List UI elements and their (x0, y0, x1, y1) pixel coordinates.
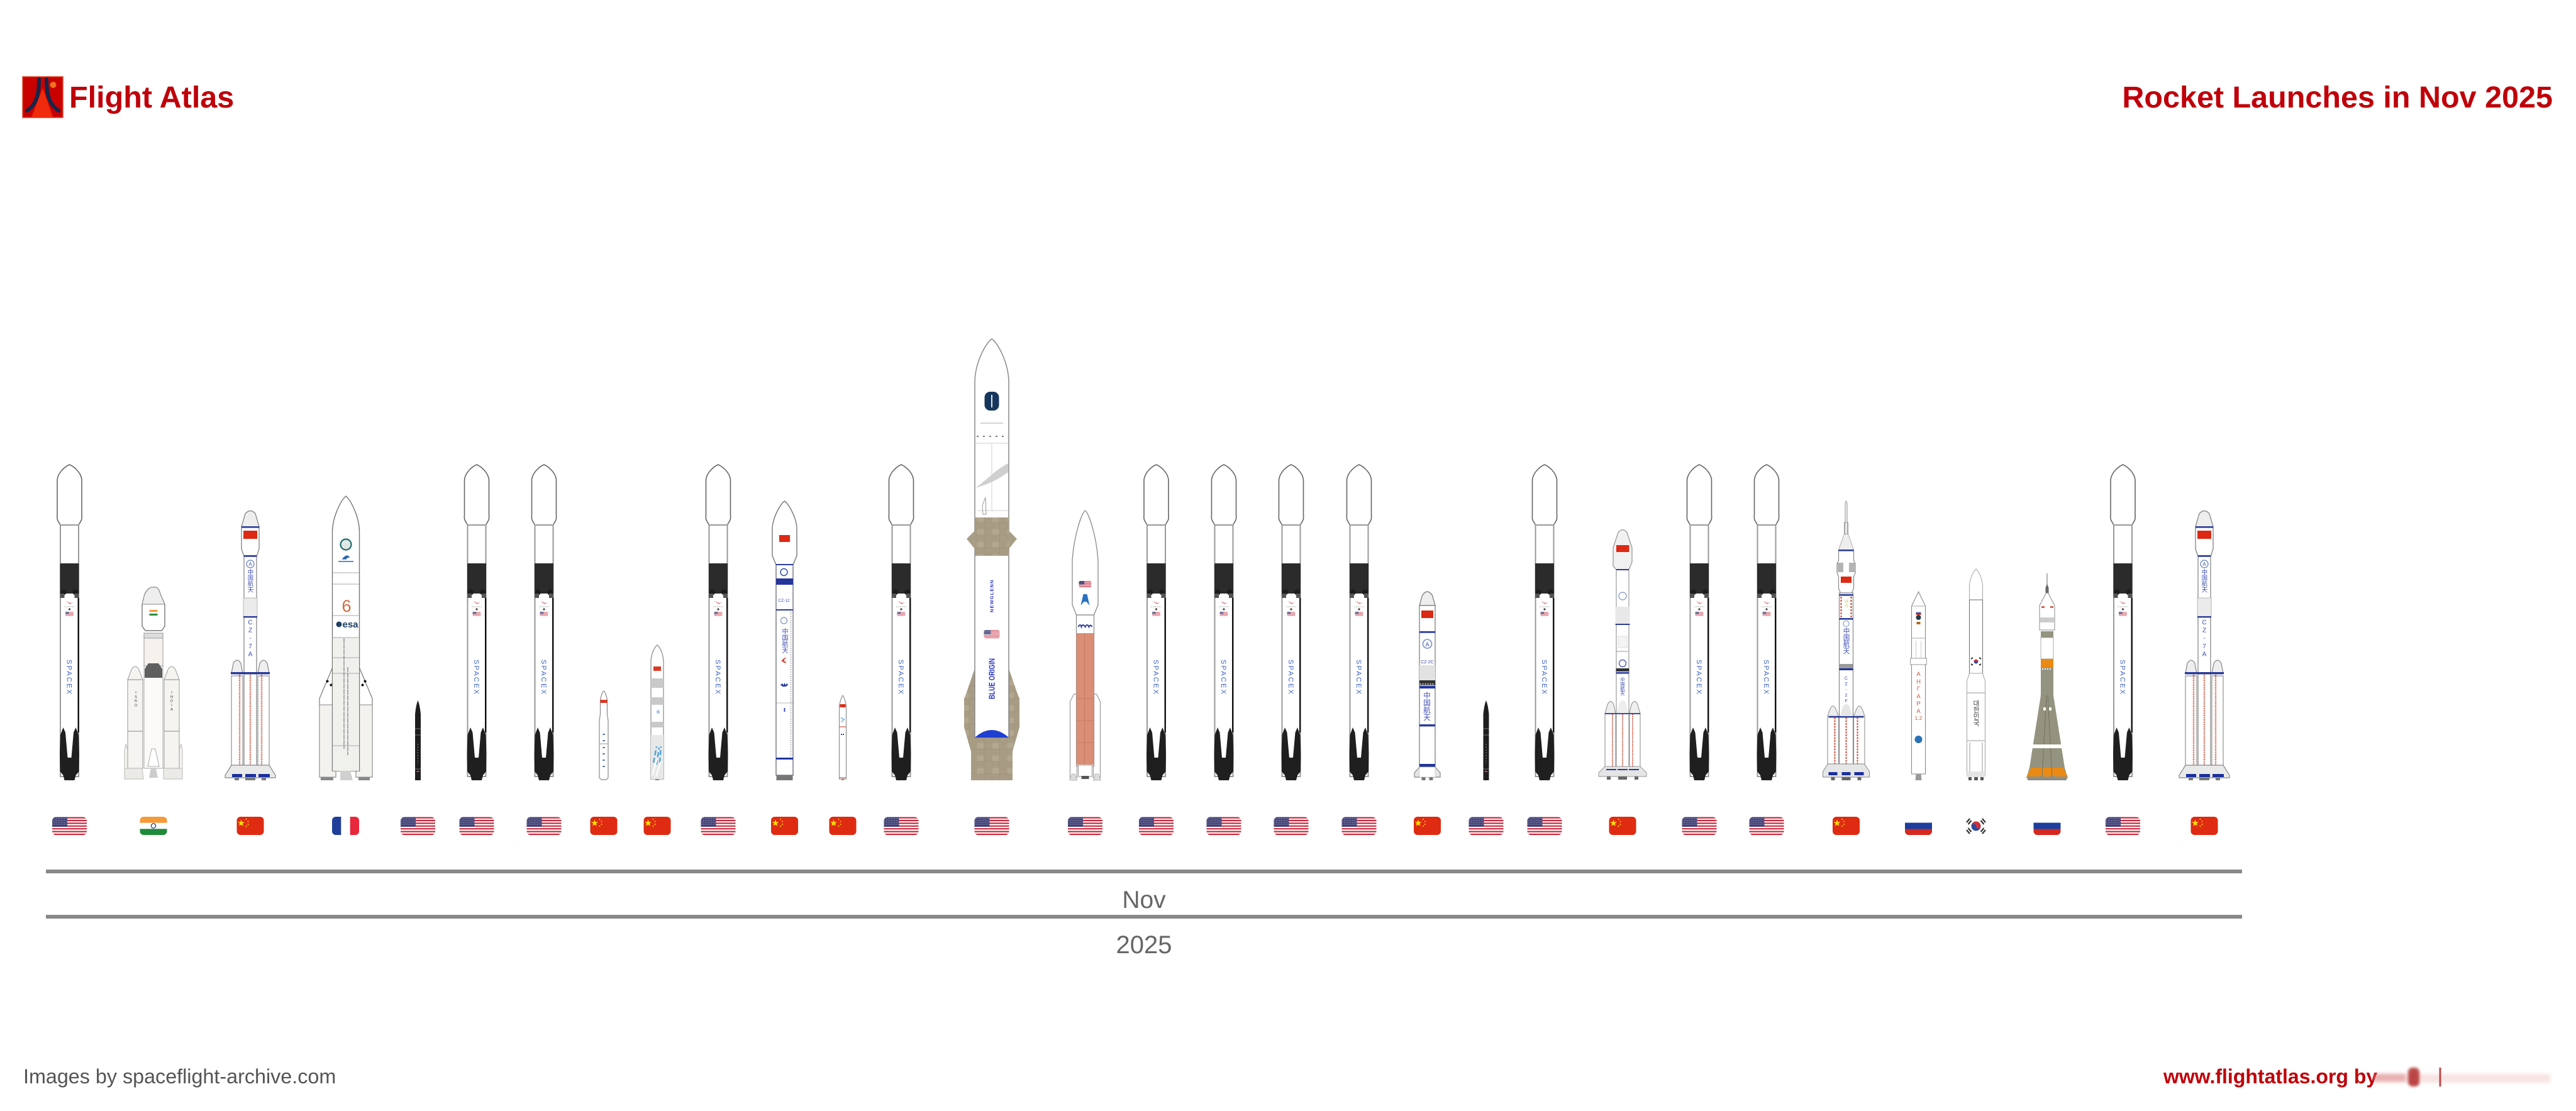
flag: China (2191, 817, 2218, 835)
flag: China (1414, 817, 1441, 835)
flag: China (1833, 817, 1860, 835)
rocket: Falcon 9 (1211, 465, 1236, 780)
rocket: Falcon 9 (1346, 465, 1372, 780)
rocket: Falcon 9 (1279, 465, 1304, 780)
redacted author name (2374, 1068, 2550, 1086)
flag: Russia (1905, 817, 1932, 835)
flag: USA (1469, 817, 1503, 835)
heading: Rocket Launches in Nov 2025: Rocket Launches in Nov 2025 (2122, 80, 2553, 114)
rocket: Long March 3B (1599, 529, 1646, 780)
flag: China (644, 817, 670, 835)
rocket: Ariane 6 (319, 496, 372, 780)
flag: France (332, 817, 359, 835)
rocket: Falcon 9 (57, 465, 82, 780)
timeline label: 2025: 2025 (1116, 931, 1172, 959)
timeline axis: month rule (46, 870, 2242, 873)
flag: USA (701, 817, 736, 835)
flag: USA (52, 817, 87, 835)
flag: USA (2106, 817, 2140, 835)
rocket: Falcon 9 (1687, 465, 1712, 780)
rocket: Falcon 9 (1532, 465, 1557, 780)
flag: USA (1342, 817, 1376, 835)
rocket: New Glenn (964, 339, 1019, 780)
flag: USA (1682, 817, 1717, 835)
flag: USA (1527, 817, 1562, 835)
timeline axis: year rule (46, 915, 2242, 919)
logo icon: Flight Atlas (23, 77, 63, 118)
heading: Flight Atlas: Flight Atlas (69, 80, 234, 114)
rocket: Falcon 9 (464, 465, 489, 780)
flag: China (590, 817, 618, 835)
flag: USA (1068, 817, 1102, 835)
rocket: Long March 2C (1414, 592, 1440, 780)
rocket: Angara 1.2 (1911, 592, 1927, 780)
rocket: Electron (1483, 700, 1489, 780)
flag: India (140, 817, 167, 835)
footer: image credit: Images by spaceflight-archive.com (23, 1065, 336, 1088)
flag: Russia (2034, 817, 2060, 835)
rocket: small Chinese launcher (839, 695, 847, 780)
rocket: small Chinese launcher (599, 691, 608, 780)
flag: USA (459, 817, 494, 835)
rocket: Falcon 9 (531, 465, 557, 780)
rocket: Falcon 9 (2111, 465, 2135, 780)
flag: China (236, 817, 264, 835)
rocket: Falcon 9 (1144, 465, 1169, 780)
rocket: Electron (415, 700, 421, 780)
flag: USA (1274, 817, 1308, 835)
footer: website credit: www.flightatlas.org by (2163, 1065, 2377, 1088)
rocket: Falcon 9 (1754, 465, 1779, 780)
rocket: Falcon 9 (889, 465, 914, 780)
rocket: Nuri KSLV-II (1967, 569, 1985, 780)
flag: South Korea (1967, 819, 1985, 834)
flag: China (829, 817, 857, 835)
flag: USA (1750, 817, 1784, 835)
flag: China (771, 817, 798, 835)
flag: USA (884, 817, 918, 835)
rocket: LVM3 (125, 587, 182, 779)
rocket: Atlas V (1069, 511, 1101, 780)
timeline label: Nov: Nov (1122, 887, 1166, 914)
flag: USA (401, 817, 435, 835)
rocket: Falcon 9 (706, 465, 731, 780)
rocket: Soyuz (2026, 573, 2068, 780)
flag: China (1609, 817, 1636, 835)
rocket: Long March 7A (2179, 511, 2229, 780)
rocket: Long March 2F (1823, 501, 1869, 780)
flag: USA (1206, 817, 1241, 835)
rocket: Long March 7A (225, 511, 275, 780)
flag: USA (527, 817, 561, 835)
rocket: Long March 12 (772, 501, 797, 780)
flag: USA (1139, 817, 1174, 835)
rocket: Chinese solid launcher (651, 645, 663, 780)
flag: USA (975, 817, 1009, 835)
